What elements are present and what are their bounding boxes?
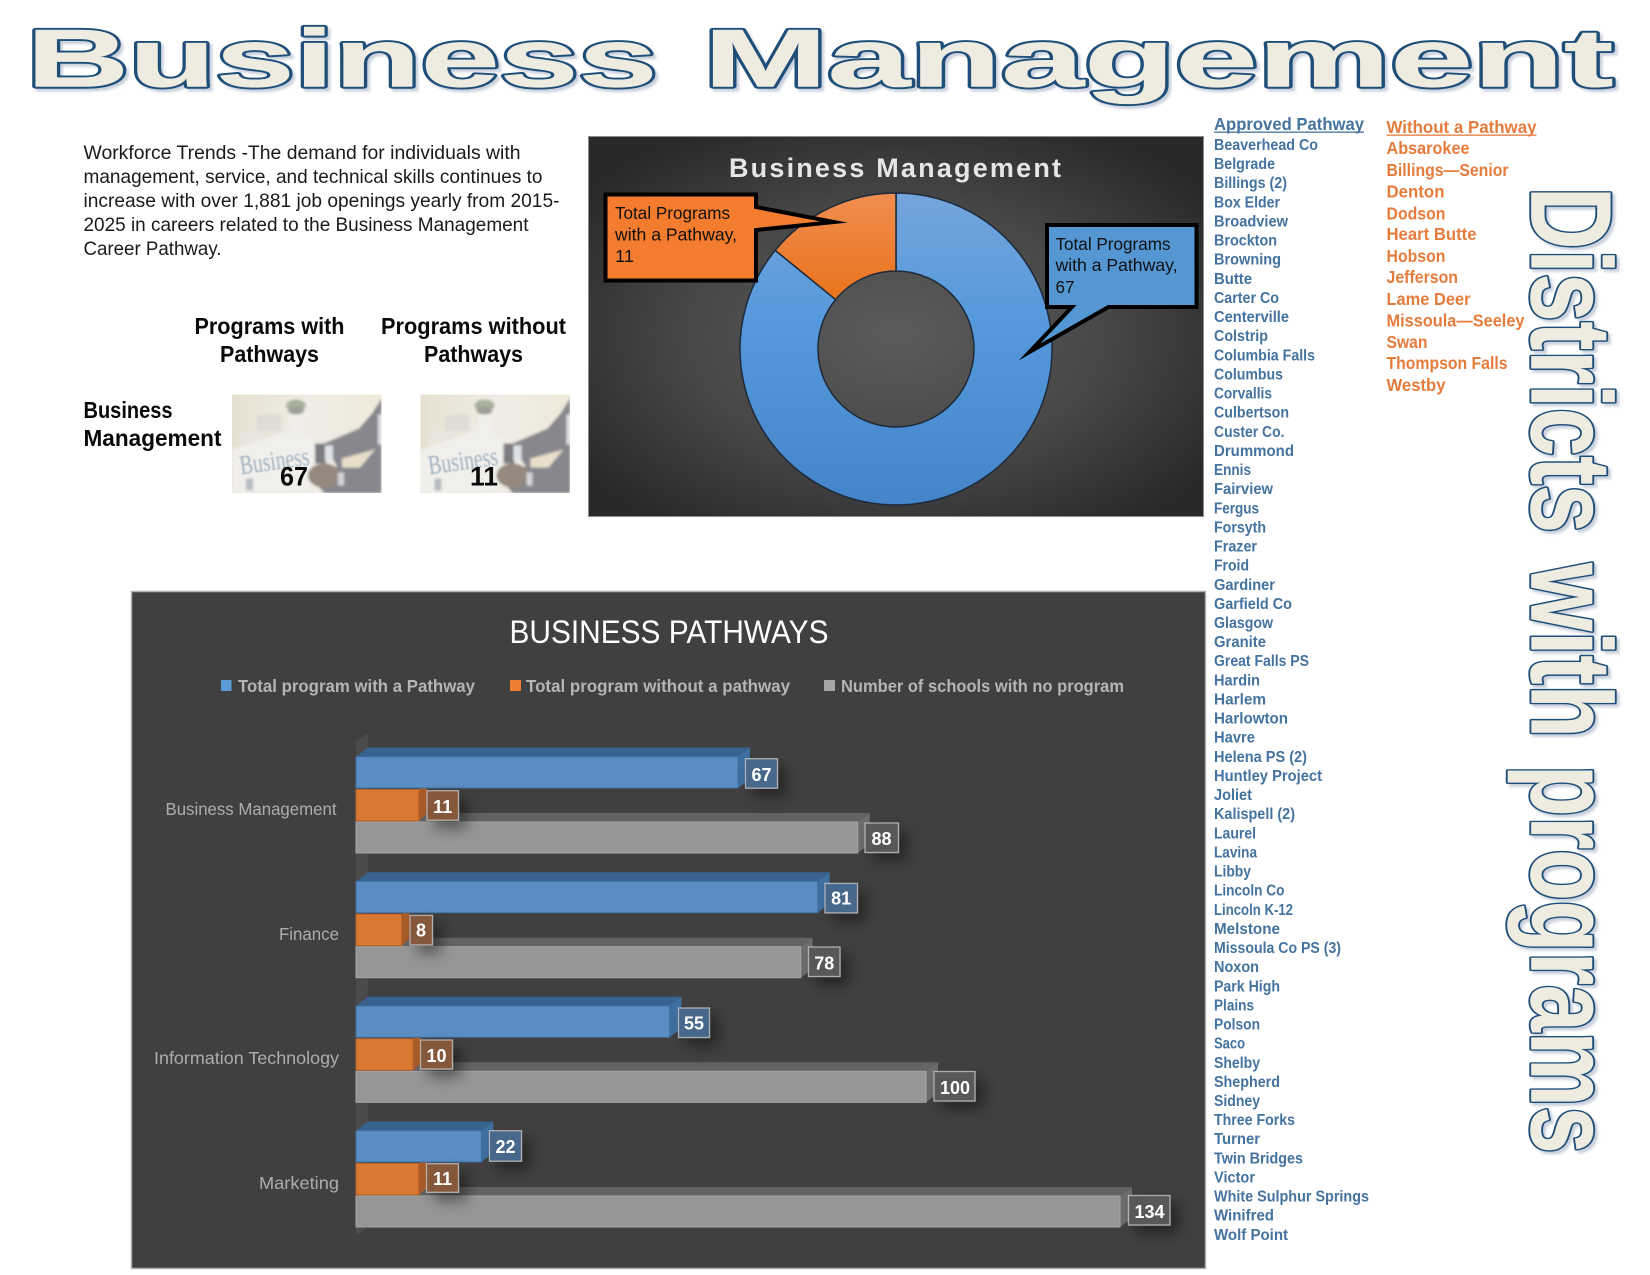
thumbnail: programs with pathways photo, 67 [232, 394, 382, 493]
list: approved pathway districts: Park High [1214, 978, 1280, 995]
title: Management [704, 14, 1614, 104]
thumbnail: programs without pathways photo, 11: 11 [470, 462, 498, 492]
list: approved pathway districts: Shelby [1214, 1055, 1260, 1072]
list: districts without a pathway: Dodson [1386, 203, 1446, 223]
title: Business [26, 14, 658, 104]
data labels: 11 [433, 797, 452, 817]
title [26, 14, 1616, 108]
list: approved pathway districts: Brockton [1214, 233, 1277, 250]
list: approved pathway districts: Shepherd [1214, 1074, 1280, 1091]
thumbnail: programs with pathways photo, 67: Business [238, 441, 311, 480]
list: approved pathway districts: Fergus [1214, 500, 1259, 517]
donut segment: without a pathway 11 [775, 193, 896, 300]
list: approved pathway districts: Centerville [1214, 309, 1289, 326]
donut chart heading: Business Management [729, 153, 1061, 183]
legend: Total program without a pathway [526, 676, 790, 696]
vertical title: districts with programs: Districts [1510, 190, 1636, 536]
list: approved pathway districts: Belgrade [1214, 156, 1275, 173]
callout: blue 67: with a Pathway, [1054, 255, 1178, 275]
vertical title: districts with programs: Districts [1506, 187, 1634, 533]
vertical title: districts with programs: Districts [1506, 187, 1634, 533]
list: districts without a pathway: Hobson [1386, 246, 1446, 266]
data labels: 81 [831, 889, 851, 909]
list: approved pathway districts: Colstrip [1214, 328, 1268, 345]
callout: orange 11: with a Pathway, [614, 224, 737, 244]
thumbnail: programs without pathways photo, 11: Business [426, 441, 500, 480]
list: approved pathway districts: Huntley Project [1214, 768, 1323, 785]
list: districts without a pathway: Denton [1386, 181, 1444, 201]
row label: business management: Business [84, 397, 172, 423]
category labels: Business Management [166, 799, 337, 819]
row label: business management [84, 397, 222, 451]
category labels: Marketing [259, 1173, 339, 1193]
list: approved pathway districts [1214, 114, 1369, 1244]
list: districts without a pathway [1386, 117, 1537, 395]
data labels: 10 [426, 1046, 447, 1066]
list: approved pathway districts: Turner [1214, 1131, 1260, 1148]
list: districts without a pathway: Missoula—Seeley [1386, 311, 1525, 331]
data labels: 8 [416, 921, 426, 941]
list: approved pathway districts: Kalispell (2) [1214, 806, 1295, 823]
legend: Number of schools with no program [841, 676, 1124, 696]
list: approved pathway districts: Billings (2) [1214, 175, 1287, 192]
thumbnail: programs with pathways photo, 67: 67 [280, 462, 308, 492]
data labels: 67 [751, 765, 772, 785]
bar chart heading: BUSINESS PATHWAYS [510, 614, 828, 650]
programs heading columns [194, 313, 566, 367]
list: approved pathway districts: Plains [1214, 997, 1254, 1014]
list: approved pathway districts: Great Falls PS [1214, 653, 1309, 670]
category labels [154, 799, 339, 1193]
list heading: without a pathway: Without a Pathway [1386, 117, 1537, 137]
list: approved pathway districts: Libby [1214, 864, 1251, 881]
workforce trends text: management, service, and technical skills continues to [84, 166, 543, 188]
row label: business management: Management [84, 425, 222, 451]
list: approved pathway districts: Froid [1214, 558, 1249, 575]
programs heading columns: Programs without [381, 313, 566, 339]
list: approved pathway districts: Fairview [1214, 481, 1274, 498]
workforce trends text: Workforce Trends -The demand for individuals with [84, 142, 520, 164]
list: approved pathway districts: Glasgow [1214, 615, 1273, 632]
list: districts without a pathway: Swan [1386, 332, 1428, 352]
programs heading columns: Pathways [220, 341, 319, 367]
list: districts without a pathway: Thompson Falls [1386, 353, 1508, 373]
list: approved pathway districts: Victor [1214, 1170, 1255, 1186]
data labels [410, 759, 1170, 1225]
panel: business pathways bar chart [132, 592, 1206, 1268]
callout: orange 11: Total Programs [615, 203, 730, 223]
list: approved pathway districts: Columbia Falls [1214, 347, 1315, 364]
list: approved pathway districts: Helena PS (2) [1214, 749, 1307, 766]
list: approved pathway districts: Lincoln K-12 [1214, 902, 1293, 919]
list: approved pathway districts: Hardin [1214, 672, 1260, 689]
thumbnail: programs without pathways photo, 11 [420, 394, 570, 493]
title: Management [706, 16, 1616, 108]
list heading: approved pathway: Approved Pathway [1214, 114, 1364, 134]
workforce trends text: 2025 in careers related to the Business Management [84, 214, 529, 236]
bars: business management [356, 748, 870, 853]
vertical title: districts with programs: with [1510, 565, 1636, 741]
list: districts without a pathway: Lame Deer [1386, 289, 1471, 309]
chart wall [356, 733, 368, 1236]
data labels: 88 [871, 829, 892, 849]
list: approved pathway districts: Gardiner [1214, 577, 1275, 594]
programs heading columns: Pathways [424, 341, 523, 367]
callout: orange 11 [606, 194, 834, 280]
programs heading columns: Programs with [194, 313, 344, 339]
list: approved pathway districts: Granite [1214, 634, 1266, 651]
callout: blue 67: Total Programs [1056, 234, 1171, 254]
data labels: 11 [433, 1169, 452, 1189]
callout: blue 67: 67 [1056, 277, 1074, 297]
list: districts without a pathway: Jefferson [1386, 267, 1458, 287]
list: approved pathway districts: Corvallis [1214, 386, 1272, 403]
data labels: 78 [814, 954, 834, 974]
title: Business [30, 16, 660, 108]
list: approved pathway districts: Garfield Co [1214, 596, 1292, 613]
list: districts without a pathway: Billings—Senior [1386, 160, 1509, 180]
list: districts without a pathway: Absarokee [1386, 138, 1470, 158]
list: approved pathway districts: Carter Co [1214, 290, 1279, 307]
list: approved pathway districts: Harlowton [1214, 711, 1288, 728]
list: approved pathway districts: Harlem [1214, 692, 1266, 708]
bars: marketing [356, 1122, 1132, 1227]
list: approved pathway districts: Twin Bridges [1214, 1150, 1303, 1167]
legend: Total program with a Pathway [238, 676, 475, 696]
data labels: 100 [940, 1078, 970, 1098]
panel: donut chart [588, 136, 1204, 516]
workforce trends text: Career Pathway. [84, 238, 222, 260]
legend [221, 676, 1124, 696]
list: approved pathway districts: Culbertson [1214, 405, 1289, 422]
workforce trends text: increase with over 1,881 job openings yearly from 2015- [84, 190, 560, 212]
list: approved pathway districts: Noxon [1214, 959, 1259, 976]
list: approved pathway districts: Beaverhead Co [1214, 137, 1318, 154]
list: approved pathway districts: Lincoln Co [1214, 883, 1285, 900]
title: Management [704, 14, 1614, 104]
list: approved pathway districts: Havre [1214, 730, 1255, 747]
data labels: 55 [684, 1013, 704, 1033]
list: approved pathway districts: Browning [1214, 252, 1281, 269]
workforce trends text [84, 142, 560, 260]
list: approved pathway districts: White Sulphur Springs [1214, 1189, 1369, 1206]
list: approved pathway districts: Missoula Co PS (3) [1214, 940, 1341, 957]
list: approved pathway districts: Custer Co. [1214, 424, 1284, 441]
data labels: 22 [495, 1137, 516, 1157]
callout: blue 67 [1030, 225, 1196, 352]
list: districts without a pathway: Westby [1386, 375, 1446, 395]
list: approved pathway districts: Polson [1214, 1016, 1260, 1034]
category labels: Information Technology [154, 1048, 339, 1068]
title: Business [26, 14, 658, 104]
list: approved pathway districts: Sidney [1214, 1093, 1260, 1110]
vertical title: districts with programs: with [1506, 562, 1634, 738]
list: approved pathway districts: Winifred [1214, 1208, 1274, 1225]
list: approved pathway districts: Drummond [1214, 443, 1294, 460]
list: approved pathway districts: Melstone [1214, 921, 1280, 938]
bars: finance [356, 872, 830, 978]
list: approved pathway districts: Box Elder [1214, 194, 1280, 211]
category labels: Finance [279, 924, 339, 944]
vertical title: districts with programs: with [1506, 562, 1634, 738]
list: approved pathway districts: Three Forks [1214, 1112, 1295, 1129]
list: approved pathway districts: Joliet [1214, 787, 1253, 804]
list: approved pathway districts: Columbus [1214, 366, 1283, 383]
list: approved pathway districts: Butte [1214, 271, 1252, 288]
list: approved pathway districts: Forsyth [1214, 519, 1266, 536]
list: approved pathway districts: Ennis [1214, 462, 1251, 479]
data labels: 134 [1134, 1202, 1165, 1222]
bars: information technology [356, 997, 938, 1102]
list: approved pathway districts: Broadview [1214, 214, 1288, 230]
callout: orange 11: 11 [615, 246, 634, 266]
list: approved pathway districts: Laurel [1214, 825, 1256, 842]
list: districts without a pathway: Heart Butte [1386, 224, 1477, 244]
vertical title: districts with programs [1506, 187, 1636, 1156]
list: approved pathway districts: Frazer [1214, 538, 1257, 556]
list: approved pathway districts: Lavina [1214, 844, 1257, 861]
list: approved pathway districts: Wolf Point [1214, 1227, 1289, 1244]
list: approved pathway districts: Saco [1214, 1036, 1245, 1053]
donut segment: with a pathway 67 [740, 193, 1052, 505]
